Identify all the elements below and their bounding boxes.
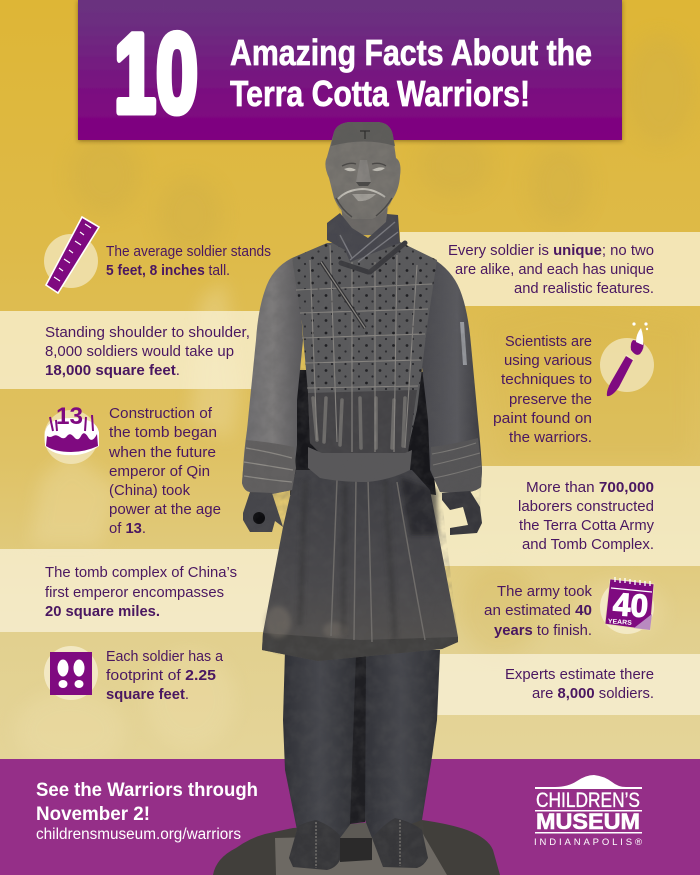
icon: calendar 40 years (600, 577, 654, 634)
title text: Terra Cotta Warriors! (230, 73, 530, 114)
logo: Children's Museum Indianapolis: INDIANAPOLIS® (534, 837, 642, 848)
belt (308, 447, 412, 482)
icon: calendar 40 years: YEARS (608, 618, 633, 627)
left arm (242, 258, 303, 494)
dark gaps behind arms (290, 370, 436, 495)
logo: Children's Museum Indianapolis: MUSEUM (536, 809, 640, 834)
icon: footprints (44, 646, 98, 700)
fact: footprint: square feet. (106, 686, 189, 703)
legs (283, 650, 440, 838)
fact: tomb complex: 20 square miles. (45, 603, 160, 620)
fact: preserving paint: paint found on (493, 410, 592, 427)
fact: laborers: the Terra Cotta Army (519, 517, 654, 534)
fact: construction of the tomb: the tomb began (109, 424, 217, 441)
fact: construction of the tomb: of 13. (109, 520, 146, 537)
fact: footprint: footprint of 2.25 (106, 667, 216, 684)
text: Construction of (109, 405, 213, 422)
text: Each soldier has a (106, 648, 224, 665)
icon: birthday cake: 13 (56, 403, 83, 430)
fact: 8,000 soldiers: are 8,000 soldiers. (532, 685, 654, 702)
footer call to action (36, 780, 258, 843)
fact: preserving paint: using various (504, 352, 592, 369)
fact: average height (44, 217, 271, 293)
fact: construction of the tomb: emperor of Qin (109, 463, 210, 480)
title text: Amazing Facts About the (230, 32, 592, 73)
logo: Children's Museum Indianapolis: CHILDREN’S (536, 789, 640, 812)
fact: 8,000 soldiers: Experts estimate there (505, 666, 654, 683)
fact: forty years: an estimated 40 (484, 602, 592, 619)
statue base (213, 820, 500, 875)
fact: shoulder to shoulder (45, 324, 250, 379)
fact: preserving paint: the warriors. (509, 429, 592, 446)
footer call to action: childrensmuseum.org/warriors (36, 826, 241, 843)
fact: preserving paint: preserve the (509, 391, 592, 408)
fact: tomb complex: The tomb complex of China’s (45, 564, 237, 581)
band: right unique (400, 232, 700, 306)
armor (292, 242, 437, 453)
icon: calendar 40 years: 40 (612, 586, 649, 624)
fact: 8,000 soldiers (505, 666, 654, 702)
band: right laborers (420, 466, 700, 566)
right arm (420, 258, 482, 493)
fact: laborers: and Tomb Complex. (522, 536, 654, 553)
fact: shoulder to shoulder: Standing shoulder to shoulder, (45, 324, 250, 341)
fact: forty years: years to finish. (494, 622, 592, 639)
fact: construction of the tomb: when the future (108, 444, 216, 461)
head (325, 122, 400, 219)
band: right experts (420, 654, 700, 715)
statue: terra cotta warrior (213, 120, 500, 875)
footer call to action: See the Warriors through (36, 780, 258, 801)
fact: construction of the tomb: (China) took (109, 482, 190, 499)
left hand (243, 492, 283, 532)
fact: laborers (518, 479, 654, 553)
fact: unique soldiers: Every soldier is unique; no two (448, 242, 654, 259)
fact: tomb complex: first emperor encompasses (45, 584, 224, 601)
fact: tomb complex (45, 564, 237, 620)
icon: paintbrush (600, 322, 654, 396)
fact: laborers: More than 700,000 (526, 479, 654, 496)
robe (262, 470, 458, 661)
text: Scientists are (505, 333, 592, 350)
fact: construction of the tomb (44, 403, 221, 537)
fact: unique soldiers: are alike, and each has unique (455, 261, 654, 278)
fact: preserving paint: techniques to (501, 371, 592, 388)
big number 10: 10 (114, 11, 198, 136)
text: The army took (497, 583, 592, 600)
fact: forty years (484, 577, 654, 639)
fact: shoulder to shoulder: 18,000 square feet. (45, 362, 180, 379)
header banner (78, 0, 622, 140)
fact: laborers: laborers constructed (518, 498, 654, 515)
fact: unique soldiers (448, 242, 654, 297)
icon: birthday cake (44, 403, 99, 464)
band: left tomb complex (0, 549, 290, 632)
neck (340, 200, 388, 235)
icon: ruler (44, 217, 99, 293)
footer band (0, 759, 700, 875)
title text (230, 32, 592, 114)
right hand (442, 491, 482, 535)
collar (327, 213, 400, 262)
text: The average soldier stands (106, 243, 271, 260)
boots (289, 818, 428, 870)
fact: average height: 5 feet, 8 inches tall. (106, 262, 230, 279)
logo: Children's Museum Indianapolis (534, 775, 642, 848)
footer call to action: November 2! (36, 804, 150, 825)
band: left 8,000 soldiers (0, 311, 270, 389)
statue surface texture (250, 152, 481, 827)
fact: construction of the tomb: power at the age (109, 501, 221, 518)
fact: footprint (44, 646, 224, 703)
fact: unique soldiers: and realistic features. (514, 280, 654, 297)
fact: shoulder to shoulder: 8,000 soldiers would take up (45, 343, 234, 360)
fact: preserving paint (493, 322, 654, 446)
